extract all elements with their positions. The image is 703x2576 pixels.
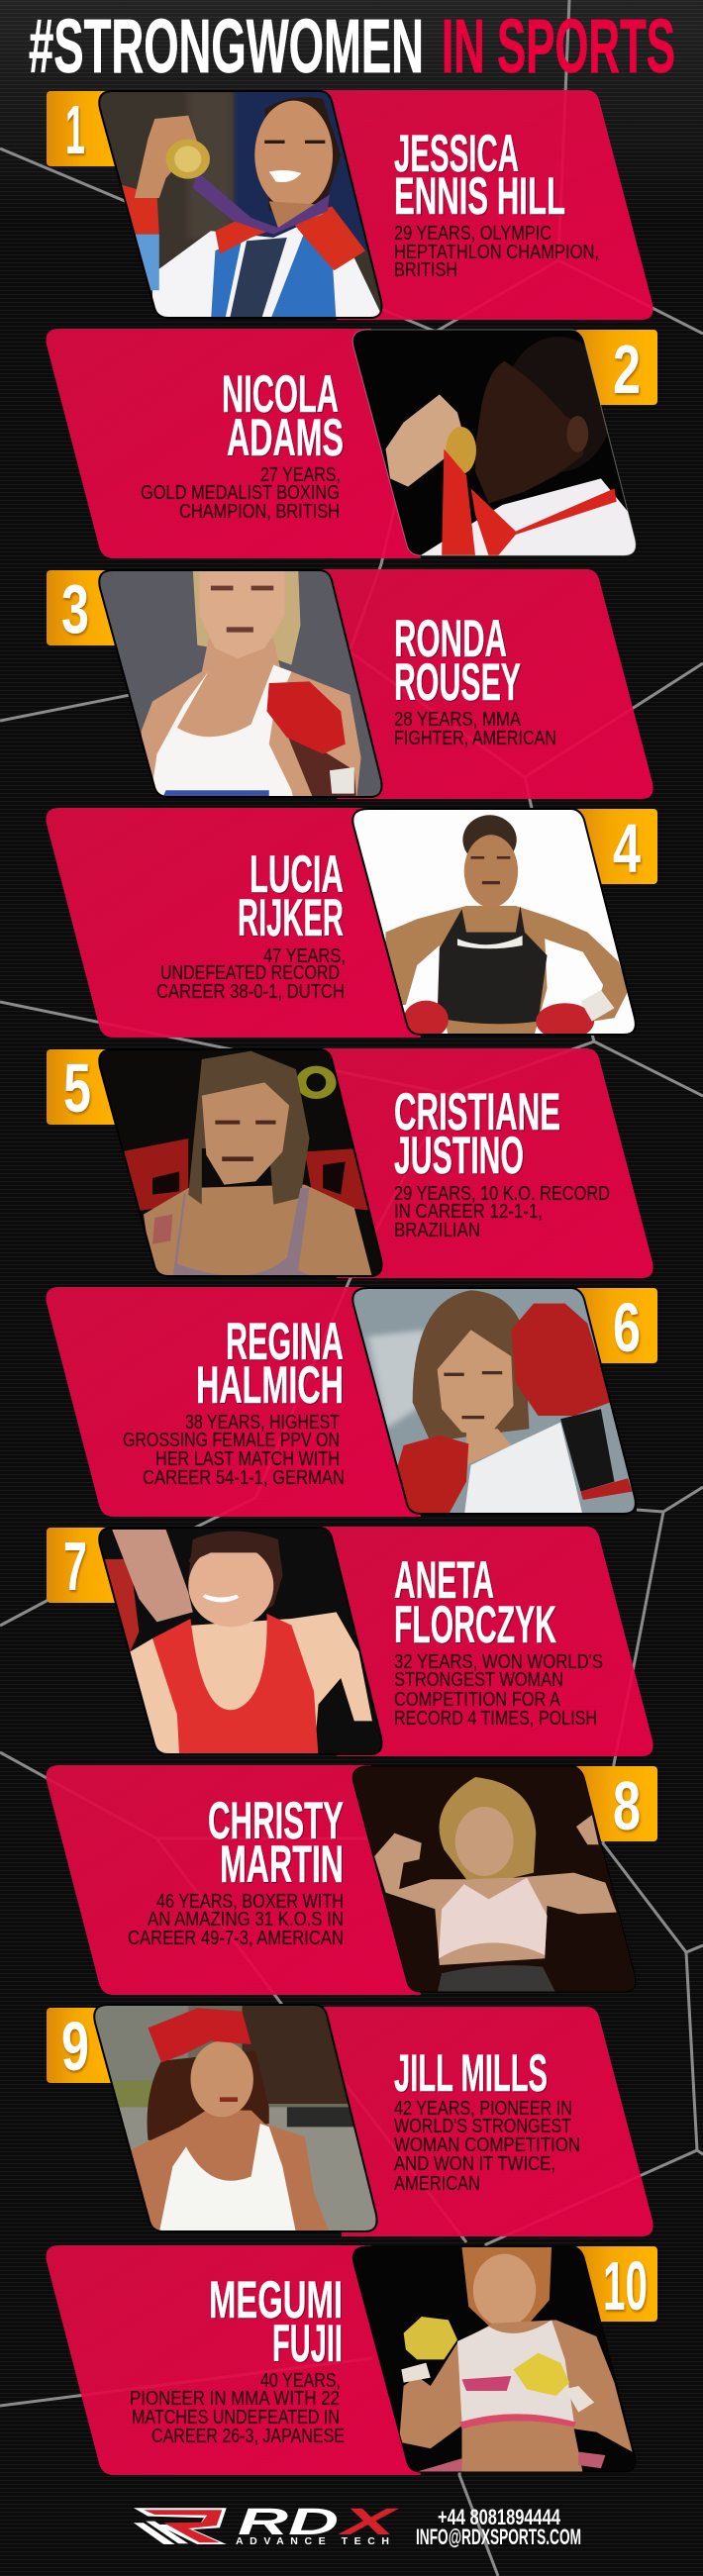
- name and bio: Aneta Florczyk: RECORD 4 TIMES, POLISH: [394, 1708, 597, 1730]
- footer logo: RDX Advance Tech: RD: [238, 2502, 339, 2543]
- number badge 8: [574, 1766, 657, 1844]
- photo: Jessica with medal: [100, 92, 380, 317]
- name and bio: Ronda Rousey: FIGHTER, AMERICAN: [394, 728, 556, 749]
- name and bio: Jessica Ennis Hill: [394, 125, 599, 281]
- photo: Jill in red bandana: [90, 2000, 395, 2234]
- number badge 5: [47, 1049, 126, 1127]
- panel: Aneta Florczyk: [47, 1523, 653, 1757]
- name and bio: Jessica Ennis Hill: BRITISH: [394, 259, 457, 281]
- red card: [317, 2007, 653, 2236]
- name and bio: Jessica Ennis Hill: JESSICA: [394, 125, 519, 183]
- name and bio: Megumi Fujii: MEGUMI: [209, 2271, 343, 2329]
- name and bio: Jill Mills: 42 YEARS, PIONEER IN: [394, 2098, 572, 2120]
- name and bio: Christy Martin: [128, 1792, 344, 1949]
- name and bio: Jessica Ennis Hill: 29 YEARS, OLYMPIC: [394, 223, 552, 245]
- name and bio: Nicola Adams: ADAMS: [227, 409, 344, 467]
- name and bio: Lucia Rijker: 47 YEARS,: [263, 945, 346, 967]
- number badge 4: [574, 809, 657, 887]
- name and bio: Cristiane Justino: CRISTIANE: [394, 1083, 560, 1141]
- name and bio: Christy Martin: CHRISTY: [208, 1792, 344, 1850]
- panel: Ronda Rousey: [47, 566, 653, 800]
- name and bio: Lucia Rijker: CAREER 38-0-1, DUTCH: [156, 981, 345, 1003]
- photo outline: [99, 91, 382, 318]
- number badge 1: [47, 91, 126, 168]
- number badge 6: [574, 1288, 657, 1366]
- photo outline: [99, 570, 382, 797]
- name and bio: Nicola Adams: NICOLA: [222, 365, 339, 424]
- red card: [47, 2245, 421, 2475]
- name and bio: Megumi Fujii: FUJII: [272, 2315, 343, 2373]
- footer logo: RDX Advance Tech: X: [338, 2502, 401, 2543]
- photo: Ronda with glove: [100, 571, 380, 796]
- icon: R mark: [134, 2508, 227, 2544]
- name and bio: Jill Mills: WORLD'S STRONGEST: [394, 2116, 571, 2137]
- name and bio: Jill Mills: JILL MILLS: [394, 2044, 548, 2103]
- name and bio: Regina Halmich: [123, 1313, 345, 1489]
- name and bio: Regina Halmich: 38 YEARS, HIGHEST: [185, 1412, 340, 1434]
- number badge 3: [47, 570, 126, 647]
- name and bio: Cristiane Justino: IN CAREER 12-1-1,: [394, 1201, 543, 1223]
- footer logo: RDX Advance Tech: [134, 2502, 401, 2547]
- name and bio: Ronda Rousey: ROUSEY: [394, 653, 521, 712]
- red card: [47, 808, 421, 1038]
- panel: Megumi Fujii: [47, 2244, 657, 2475]
- red card: [47, 1287, 421, 1517]
- footer contact details: INFO@RDXSPORTS.COM: [416, 2525, 581, 2549]
- name and bio: Regina Halmich: GROSSING FEMALE PPV ON: [123, 1430, 340, 1451]
- name and bio: Regina Halmich: REGINA: [226, 1313, 344, 1371]
- footer contact details: +44 8081894444: [438, 2505, 561, 2529]
- panel: Nicola Adams: [47, 327, 657, 558]
- name and bio: Megumi Fujii: [130, 2271, 345, 2447]
- number badge 5: 5: [63, 1049, 91, 1127]
- name and bio: Megumi Fujii: PIONEER IN MMA WITH 22: [130, 2388, 340, 2410]
- panel: Jessica Ennis Hill: [47, 86, 653, 324]
- photo outline: [99, 1528, 382, 1754]
- name and bio: Christy Martin: MARTIN: [220, 1835, 344, 1894]
- name and bio: Nicola Adams: [141, 365, 344, 523]
- number badge 4: 4: [613, 810, 641, 887]
- name and bio: Aneta Florczyk: 32 YEARS, WON WORLD'S: [394, 1651, 603, 1673]
- name and bio: Jill Mills: [394, 2044, 580, 2195]
- red card: [317, 569, 653, 799]
- name and bio: Regina Halmich: CAREER 54-1-1, GERMAN: [143, 1467, 345, 1489]
- number badge 3: 3: [61, 570, 89, 647]
- photo: Lucia in black top: [350, 807, 642, 1040]
- photo: Cristiane with braids: [100, 1050, 380, 1275]
- photo: Nicola kissing medal: [350, 327, 642, 557]
- name and bio: Jill Mills: AMERICAN: [394, 2173, 480, 2195]
- name and bio: Christy Martin: AN AMAZING 31 K.O.S IN: [148, 1909, 344, 1931]
- photo outline: [352, 1766, 636, 1992]
- name and bio: Regina Halmich: HALMICH: [196, 1356, 344, 1415]
- footer logo: RDX Advance Tech: ADVANCE TECH: [236, 2535, 389, 2547]
- red card: [317, 90, 653, 320]
- photo outline: [352, 2246, 636, 2472]
- name and bio: Aneta Florczyk: ANETA: [394, 1551, 494, 1610]
- number badge 2: 2: [613, 331, 641, 408]
- photo outline: [94, 2005, 377, 2231]
- name and bio: Nicola Adams: CHAMPION, BRITISH: [179, 501, 340, 523]
- photo: Megumi with yellow gloves: [350, 2244, 642, 2475]
- name and bio: Cristiane Justino: [394, 1083, 610, 1241]
- panel: Cristiane Justino: [47, 1046, 653, 1280]
- panel: Lucia Rijker: [47, 807, 657, 1040]
- photo: Regina with red gloves: [350, 1287, 642, 1518]
- photo outline: [99, 1049, 382, 1276]
- name and bio: Nicola Adams: GOLD MEDALIST BOXING: [141, 482, 340, 504]
- number badge 10: [574, 2246, 657, 2325]
- name and bio: Cristiane Justino: JUSTINO: [394, 1127, 524, 1185]
- number badge 2: [574, 330, 657, 408]
- name and bio: Aneta Florczyk: [394, 1551, 603, 1730]
- photo outline: [352, 330, 636, 555]
- red card: [317, 1048, 653, 1278]
- name and bio: Ronda Rousey: 28 YEARS, MMA: [394, 709, 522, 731]
- red card: [47, 329, 421, 558]
- red card: [317, 1527, 653, 1756]
- name and bio: Lucia Rijker: RIJKER: [238, 889, 344, 947]
- name and bio: Lucia Rijker: UNDEFEATED RECORD: [160, 962, 340, 984]
- number badge 9: 9: [61, 2008, 89, 2085]
- name and bio: Jill Mills: AND WON IT TWICE,: [394, 2153, 555, 2175]
- name and bio: Lucia Rijker: [156, 845, 346, 1003]
- name and bio: Jill Mills: WOMAN COMPETITION: [394, 2134, 580, 2156]
- panel: Jill Mills: [47, 2007, 653, 2236]
- name and bio: Nicola Adams: 27 YEARS,: [260, 464, 341, 486]
- number badge 10: 10: [603, 2247, 648, 2325]
- name and bio: Christy Martin: 46 YEARS, BOXER WITH: [156, 1891, 344, 1913]
- title: #STRONGWOMEN: [29, 4, 424, 89]
- photo outline: [352, 1288, 636, 1514]
- number badge 7: [47, 1528, 126, 1605]
- name and bio: Regina Halmich: HER LAST MATCH WITH: [155, 1448, 340, 1470]
- number badge 9: [47, 2008, 116, 2085]
- number badge 8: 8: [613, 1767, 641, 1844]
- photo: Christy flexing: [350, 1764, 642, 1995]
- name and bio: Lucia Rijker: LUCIA: [250, 845, 344, 904]
- name and bio: Megumi Fujii: MATCHES UNDEFEATED IN: [132, 2407, 340, 2428]
- footer contact details: [416, 2505, 581, 2549]
- red card: [47, 1765, 421, 1995]
- name and bio: Cristiane Justino: 29 YEARS, 10 K.O. RECORD: [394, 1183, 610, 1205]
- photo: Aneta in red top: [100, 1529, 380, 1753]
- name and bio: Megumi Fujii: CAREER 26-3, JAPANESE: [151, 2426, 345, 2447]
- name and bio: Ronda Rousey: [394, 610, 556, 749]
- name and bio: Ronda Rousey: RONDA: [394, 610, 507, 668]
- number badge 6: 6: [613, 1289, 641, 1366]
- name and bio: Megumi Fujii: 40 YEARS,: [260, 2370, 341, 2392]
- name and bio: Jessica Ennis Hill: HEPTATHLON CHAMPION,: [394, 242, 599, 263]
- number badge 7: 7: [63, 1528, 87, 1605]
- panel: Christy Martin: [47, 1764, 657, 1995]
- name and bio: Aneta Florczyk: STRONGEST WOMAN: [394, 1669, 563, 1691]
- number badge 1: 1: [65, 91, 85, 168]
- name and bio: Jessica Ennis Hill: ENNIS HILL: [394, 167, 565, 226]
- name and bio: Aneta Florczyk: FLORCZYK: [394, 1596, 556, 1654]
- name and bio: Aneta Florczyk: COMPETITION FOR A: [394, 1689, 561, 1711]
- name and bio: Christy Martin: CAREER 49-7-3, AMERICAN: [128, 1928, 344, 1949]
- name and bio: Cristiane Justino: BRAZILIAN: [394, 1220, 480, 1241]
- panel: Regina Halmich: [47, 1287, 657, 1518]
- photo outline: [352, 809, 636, 1035]
